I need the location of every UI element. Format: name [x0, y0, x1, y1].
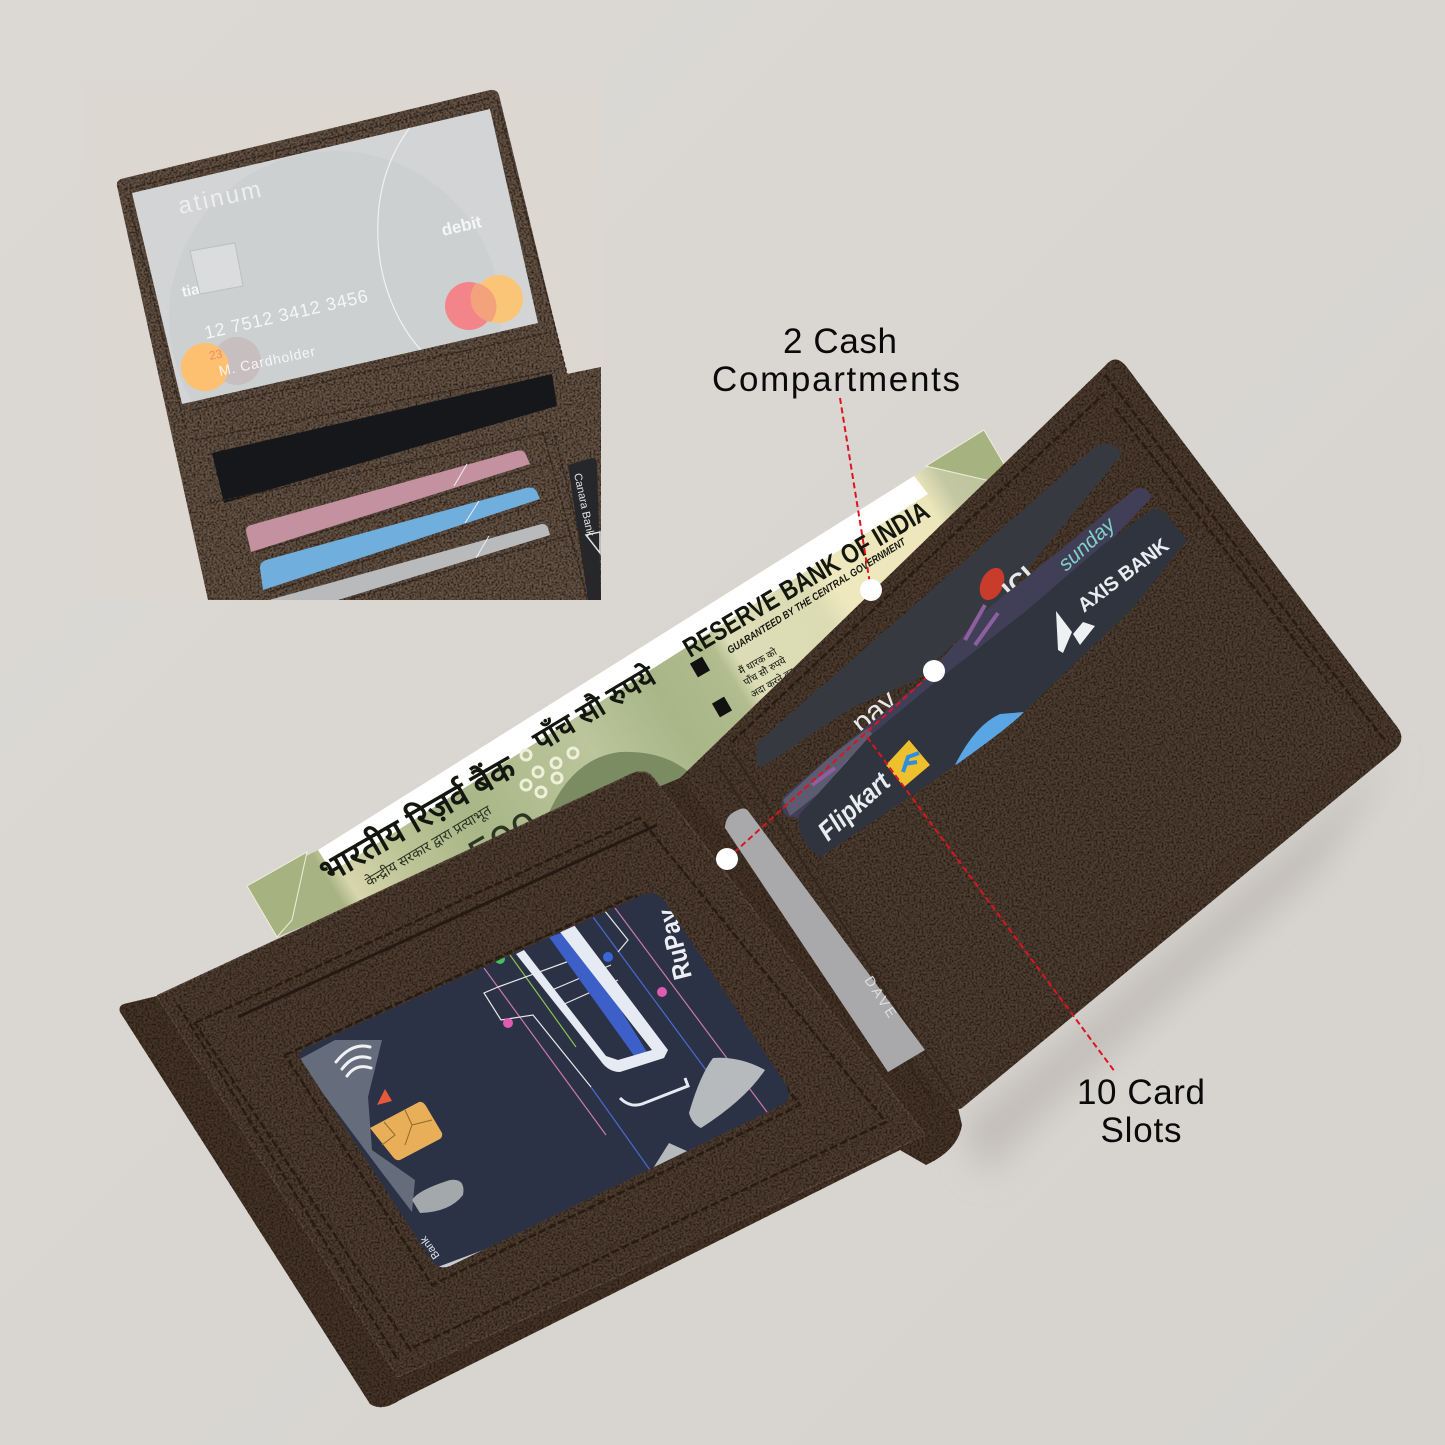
wallet — [120, 360, 1401, 1407]
callout dots — [716, 579, 945, 870]
bank text: Payments — [390, 1222, 428, 1269]
inset: card text: debit — [440, 212, 484, 240]
axis and flipkart card — [799, 509, 1187, 858]
inset: side card — [568, 458, 601, 600]
note text — [312, 496, 935, 890]
ICICI card: pay — [845, 684, 904, 740]
inset stitching — [124, 98, 595, 599]
inset: card text: M. Cardholder — [217, 343, 317, 379]
note text: पाँच सौ रुपये — [526, 658, 662, 759]
banknote — [247, 430, 1011, 937]
network triangle — [377, 1089, 392, 1105]
note watermark rings — [521, 748, 578, 797]
silver card — [725, 808, 925, 1072]
right panel stitching — [732, 375, 1386, 1075]
bank text: Bank — [418, 1233, 442, 1261]
inset: card text: 12 7512 3412 3456 — [202, 286, 370, 343]
inset: blue card — [260, 488, 540, 590]
label: 10 Card Slots: 10 Card — [1077, 1073, 1205, 1112]
inset: card text: tia — [180, 281, 202, 301]
card wave graphic — [955, 712, 1024, 765]
sunday card — [782, 488, 1152, 818]
note text: मैं धारक को — [736, 646, 780, 678]
label: 2 Cash Compartments: 2 Cash — [783, 322, 897, 361]
spine seams — [718, 751, 955, 1105]
note white strip — [318, 476, 928, 872]
inset: card text: atinum — [176, 176, 263, 220]
left flap — [157, 772, 925, 1377]
note text: अदा करने का — [748, 666, 797, 701]
label: 2 Cash Compartments — [712, 322, 960, 399]
axis and flipkart card: Flipkart — [812, 766, 897, 846]
left flap slot — [238, 825, 657, 1017]
window card overlay — [298, 1040, 415, 1212]
note corner pattern left — [247, 852, 307, 937]
axis and flipkart card: AXIS BANK — [1074, 534, 1174, 617]
ID window — [290, 885, 800, 1275]
axis logo — [1056, 611, 1095, 653]
note text: पाँच सौ रुपये — [742, 655, 788, 689]
wallet drop shadow — [960, 755, 1395, 1175]
note corner pattern right — [926, 430, 1011, 484]
inset: grey card — [269, 524, 550, 600]
inset: transparent window with card — [132, 109, 538, 404]
label: 2 Cash Compartments: Compartments — [712, 360, 960, 399]
RuPay label: RuPay — [651, 905, 698, 983]
note text: भारतीय रिज़र्व बैंक — [312, 747, 523, 890]
pink and blue pins — [495, 952, 667, 1028]
window card white train — [516, 925, 668, 1072]
left flap stitching — [178, 818, 886, 1360]
window card blue band — [549, 930, 647, 1057]
inset: card text: 23 — [208, 346, 224, 363]
callout lines — [727, 398, 1115, 1072]
inset: pink card — [246, 450, 530, 552]
sunday card: sunday — [1054, 512, 1121, 576]
ICICI card: ICI — [996, 560, 1041, 604]
ICICI card — [756, 444, 1122, 767]
window card grey shapes — [689, 1058, 765, 1128]
note text: केन्द्रीय सरकार द्वारा प्रत्याभूत — [362, 801, 495, 890]
inset: side card: Canara Bank — [571, 472, 596, 538]
window card route lines — [484, 908, 767, 1170]
label: 10 Card Slots: Slots — [1100, 1111, 1182, 1150]
wallet back and hinge — [120, 745, 962, 1407]
note text: 500 — [460, 802, 549, 881]
card sheen lines — [454, 464, 489, 558]
note text: RESERVE BANK OF INDIA — [678, 496, 935, 663]
inset: mastercard logo — [445, 275, 523, 330]
inset: black slot — [212, 374, 557, 503]
inset panel: ID window detail — [82, 81, 602, 600]
right pocket front — [822, 529, 1370, 1085]
silver card: DAVE — [861, 973, 902, 1023]
note text: GUARANTEED BY THE CENTRAL GOVERNMENT — [725, 535, 909, 657]
flipkart logo — [886, 740, 930, 787]
inset: chip — [190, 243, 243, 294]
window card blob — [412, 1180, 463, 1213]
chip — [370, 1102, 442, 1160]
inset: wallet leather — [117, 90, 601, 600]
contactless icon — [336, 1046, 371, 1076]
note portrait — [548, 752, 695, 840]
ICICI logo — [975, 564, 1009, 604]
inset: card text — [176, 176, 484, 379]
label: 10 Card Slots — [1077, 1073, 1205, 1150]
wallet right panel — [680, 360, 1401, 1109]
inset: faded logo — [181, 337, 261, 391]
note black squares — [690, 657, 732, 717]
